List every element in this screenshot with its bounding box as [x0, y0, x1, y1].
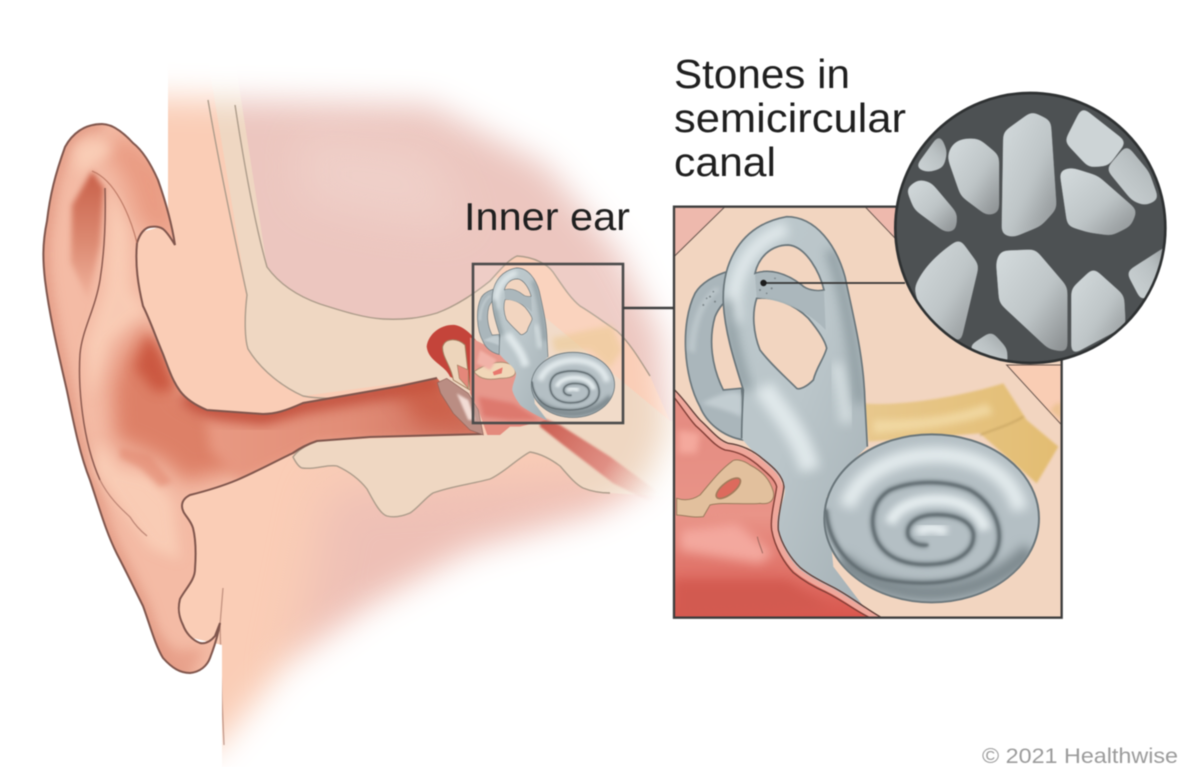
label: Inner ear: Inner ear: [464, 196, 630, 239]
ear outline: [43, 124, 483, 673]
small inner ear locator box: [473, 264, 623, 423]
ear shading: [43, 124, 495, 673]
inset: enlarged inner ear: [674, 207, 1062, 620]
label: Stones in semicircular canal: [674, 51, 906, 185]
label: Stones in semicircular canal: Stones in: [674, 51, 850, 97]
inset frame: [674, 207, 1062, 618]
magnified circle: otoconia stones: [895, 93, 1172, 368]
pointer line from canal to magnified stones: [760, 280, 905, 286]
head cross-section: skin, bone and soft tissue: [136, 79, 673, 762]
ear: outer auricle and canal: [43, 124, 495, 673]
middle ear wall: [674, 389, 882, 620]
label: Stones in semicircular canal: semicircular: [674, 95, 906, 141]
middle ear and eustachian tube: [427, 325, 660, 505]
label: Stones in semicircular canal: canal: [674, 139, 776, 185]
locator box frame: [473, 264, 623, 423]
connector line from locator box to inset: [623, 307, 675, 309]
small labyrinth: [477, 268, 615, 421]
nerve small: [552, 326, 622, 368]
stapes bone: [677, 460, 774, 517]
stones location speckles: [702, 277, 776, 306]
